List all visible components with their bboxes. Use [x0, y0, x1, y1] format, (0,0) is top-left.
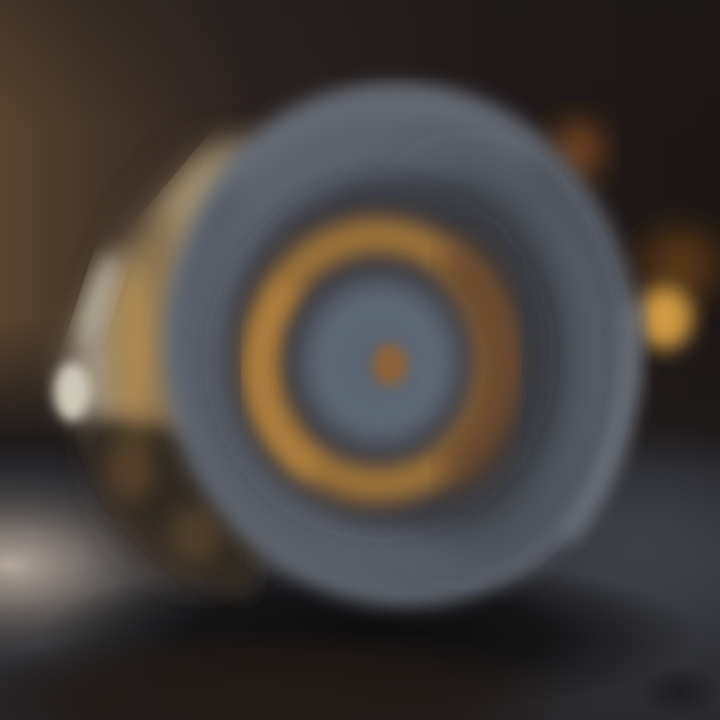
background glow lights: [554, 122, 720, 350]
cylinder side: gold and white edge: [54, 123, 368, 600]
dark table foreground and contact shadow: [0, 555, 720, 720]
light reflection: lower left: [0, 455, 225, 675]
disc: [132, 55, 672, 635]
right bright rim: [565, 300, 632, 540]
table surface: [0, 440, 720, 720]
orange ring: [262, 236, 494, 484]
orange ring brighter left side: [258, 285, 315, 472]
gold highlight: [118, 257, 154, 433]
centre hub: [288, 264, 472, 460]
disc face: [132, 55, 672, 635]
upper rim highlight: [235, 110, 530, 190]
white highlight: [54, 363, 90, 421]
disc right-side shadow: [365, 170, 575, 550]
outer band shading: [162, 120, 618, 596]
lower gold and dark pattern: [85, 420, 270, 600]
orange ring darker right side: [450, 255, 501, 475]
background wall: [0, 0, 720, 440]
light reflection: lower right: [450, 420, 720, 680]
centre dot: [372, 344, 408, 386]
dark halo around orange ring: [228, 198, 532, 518]
